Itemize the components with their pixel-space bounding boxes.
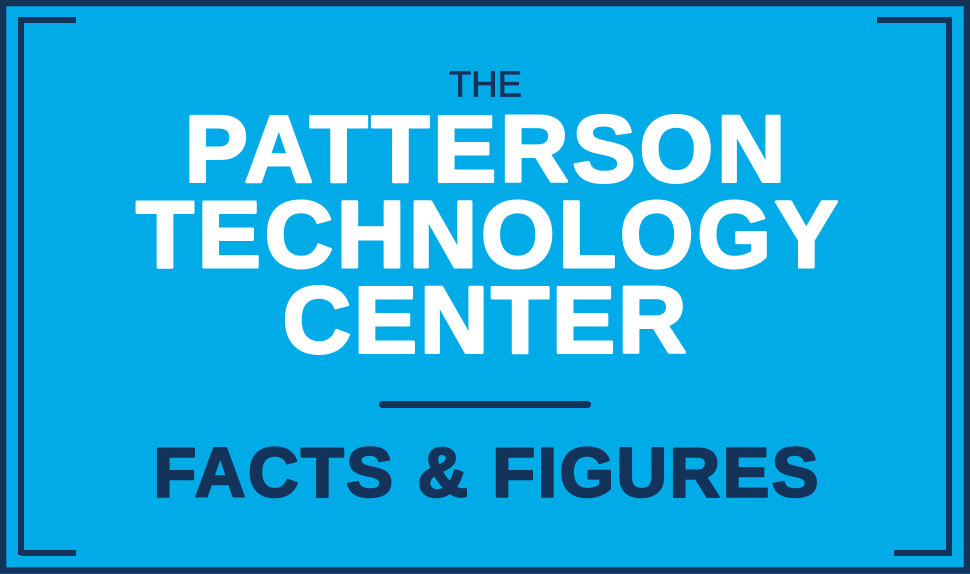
subtitle: FACTS & FIGURES: FACTS & FIGURES bbox=[154, 434, 818, 512]
corner bracket: bottom left bbox=[21, 550, 76, 556]
divider bbox=[379, 401, 591, 408]
corner bracket: top right bbox=[877, 20, 949, 553]
title bbox=[136, 96, 838, 374]
title: TECHNOLOGY bbox=[136, 182, 838, 288]
eyebrow: THE: THE bbox=[449, 64, 522, 104]
title: CENTER bbox=[282, 268, 686, 374]
title: PATTERSON bbox=[184, 96, 786, 202]
corner bracket: top left bbox=[21, 20, 76, 555]
